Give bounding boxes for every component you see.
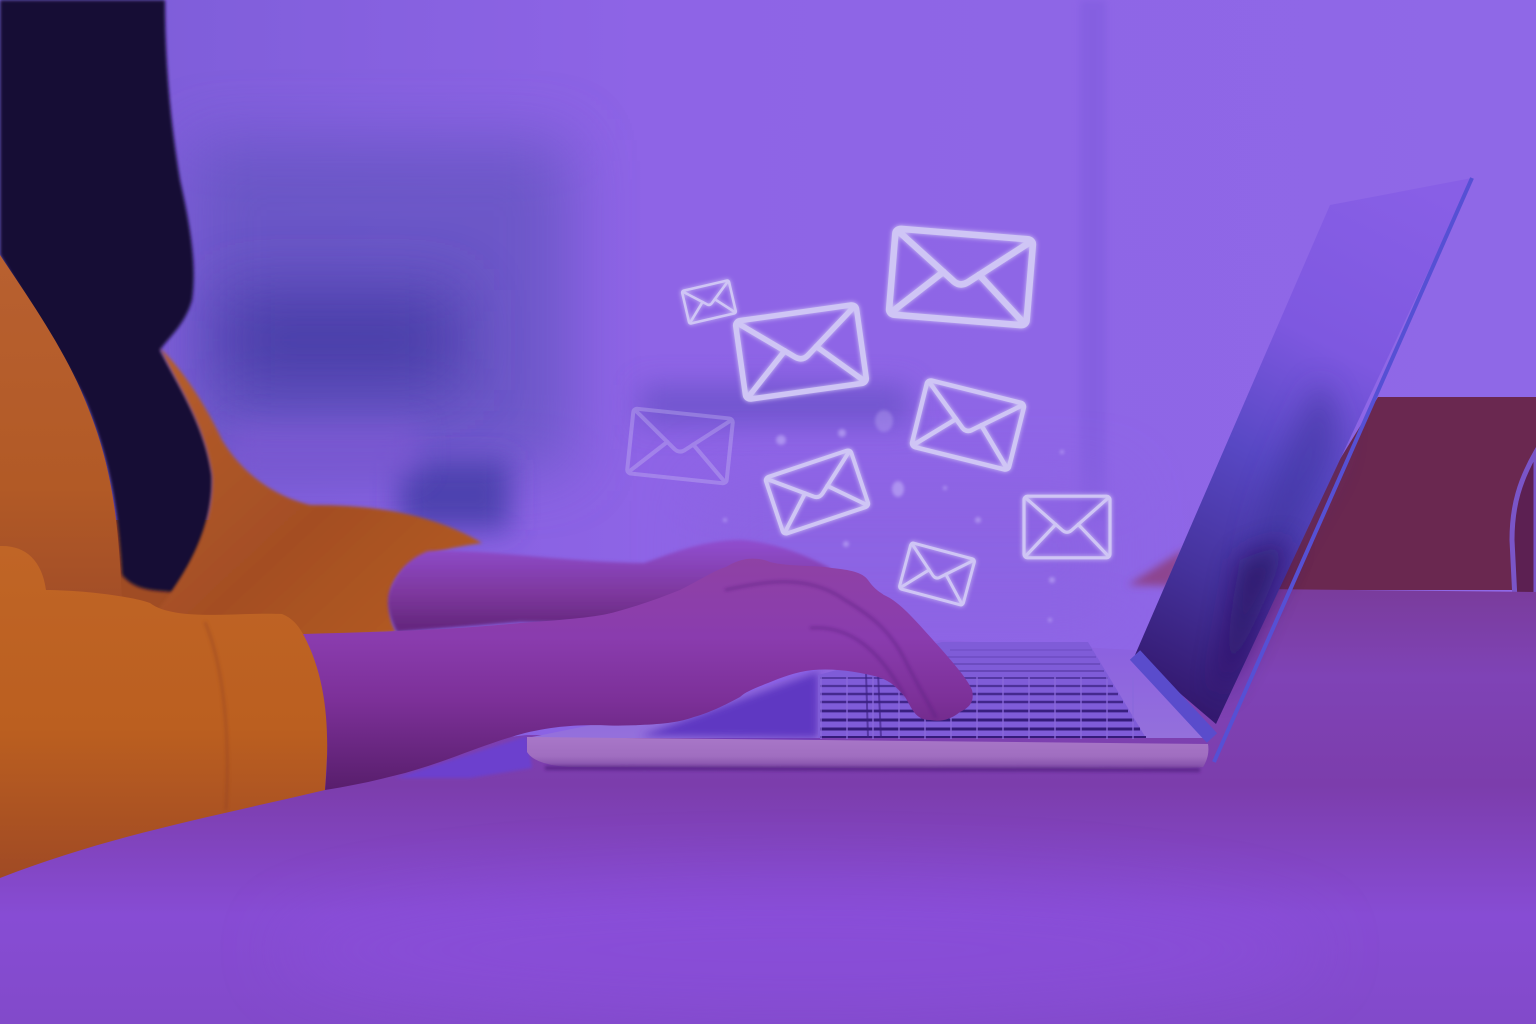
keyboard — [818, 642, 1146, 738]
table surface glow — [280, 880, 1320, 1020]
icon: small email envelope — [682, 280, 736, 324]
upper sleeve — [150, 348, 482, 640]
palm rest shadow — [640, 672, 818, 738]
orange sweater — [0, 255, 482, 878]
front hand and fingers — [585, 559, 973, 726]
sparkles — [723, 410, 1064, 622]
red wedge behind laptop — [1128, 548, 1186, 586]
laptop deck — [527, 640, 1212, 738]
torso — [0, 255, 122, 640]
icon: email envelope centre — [765, 450, 869, 534]
front forearm — [303, 613, 640, 790]
icon: email envelope lowest — [899, 542, 975, 606]
icon: email envelope upper middle — [735, 304, 867, 400]
laptop screen — [1135, 178, 1472, 762]
icon: email envelope far right — [1024, 496, 1110, 558]
icon: large email envelope — [889, 228, 1033, 326]
icon: faded email envelope — [627, 408, 733, 484]
table glow wedge under forearm — [395, 736, 532, 778]
front sleeve and cuff — [0, 546, 328, 878]
red sideboard at right — [1260, 397, 1536, 590]
hair — [0, 0, 212, 592]
small object at right edge — [1512, 452, 1536, 663]
sweater shadow behind hair — [100, 520, 230, 640]
table — [0, 588, 1536, 1024]
icon: email envelope right middle — [911, 380, 1025, 470]
laptop base edge — [527, 737, 1208, 770]
back forearm and hand — [388, 540, 830, 632]
